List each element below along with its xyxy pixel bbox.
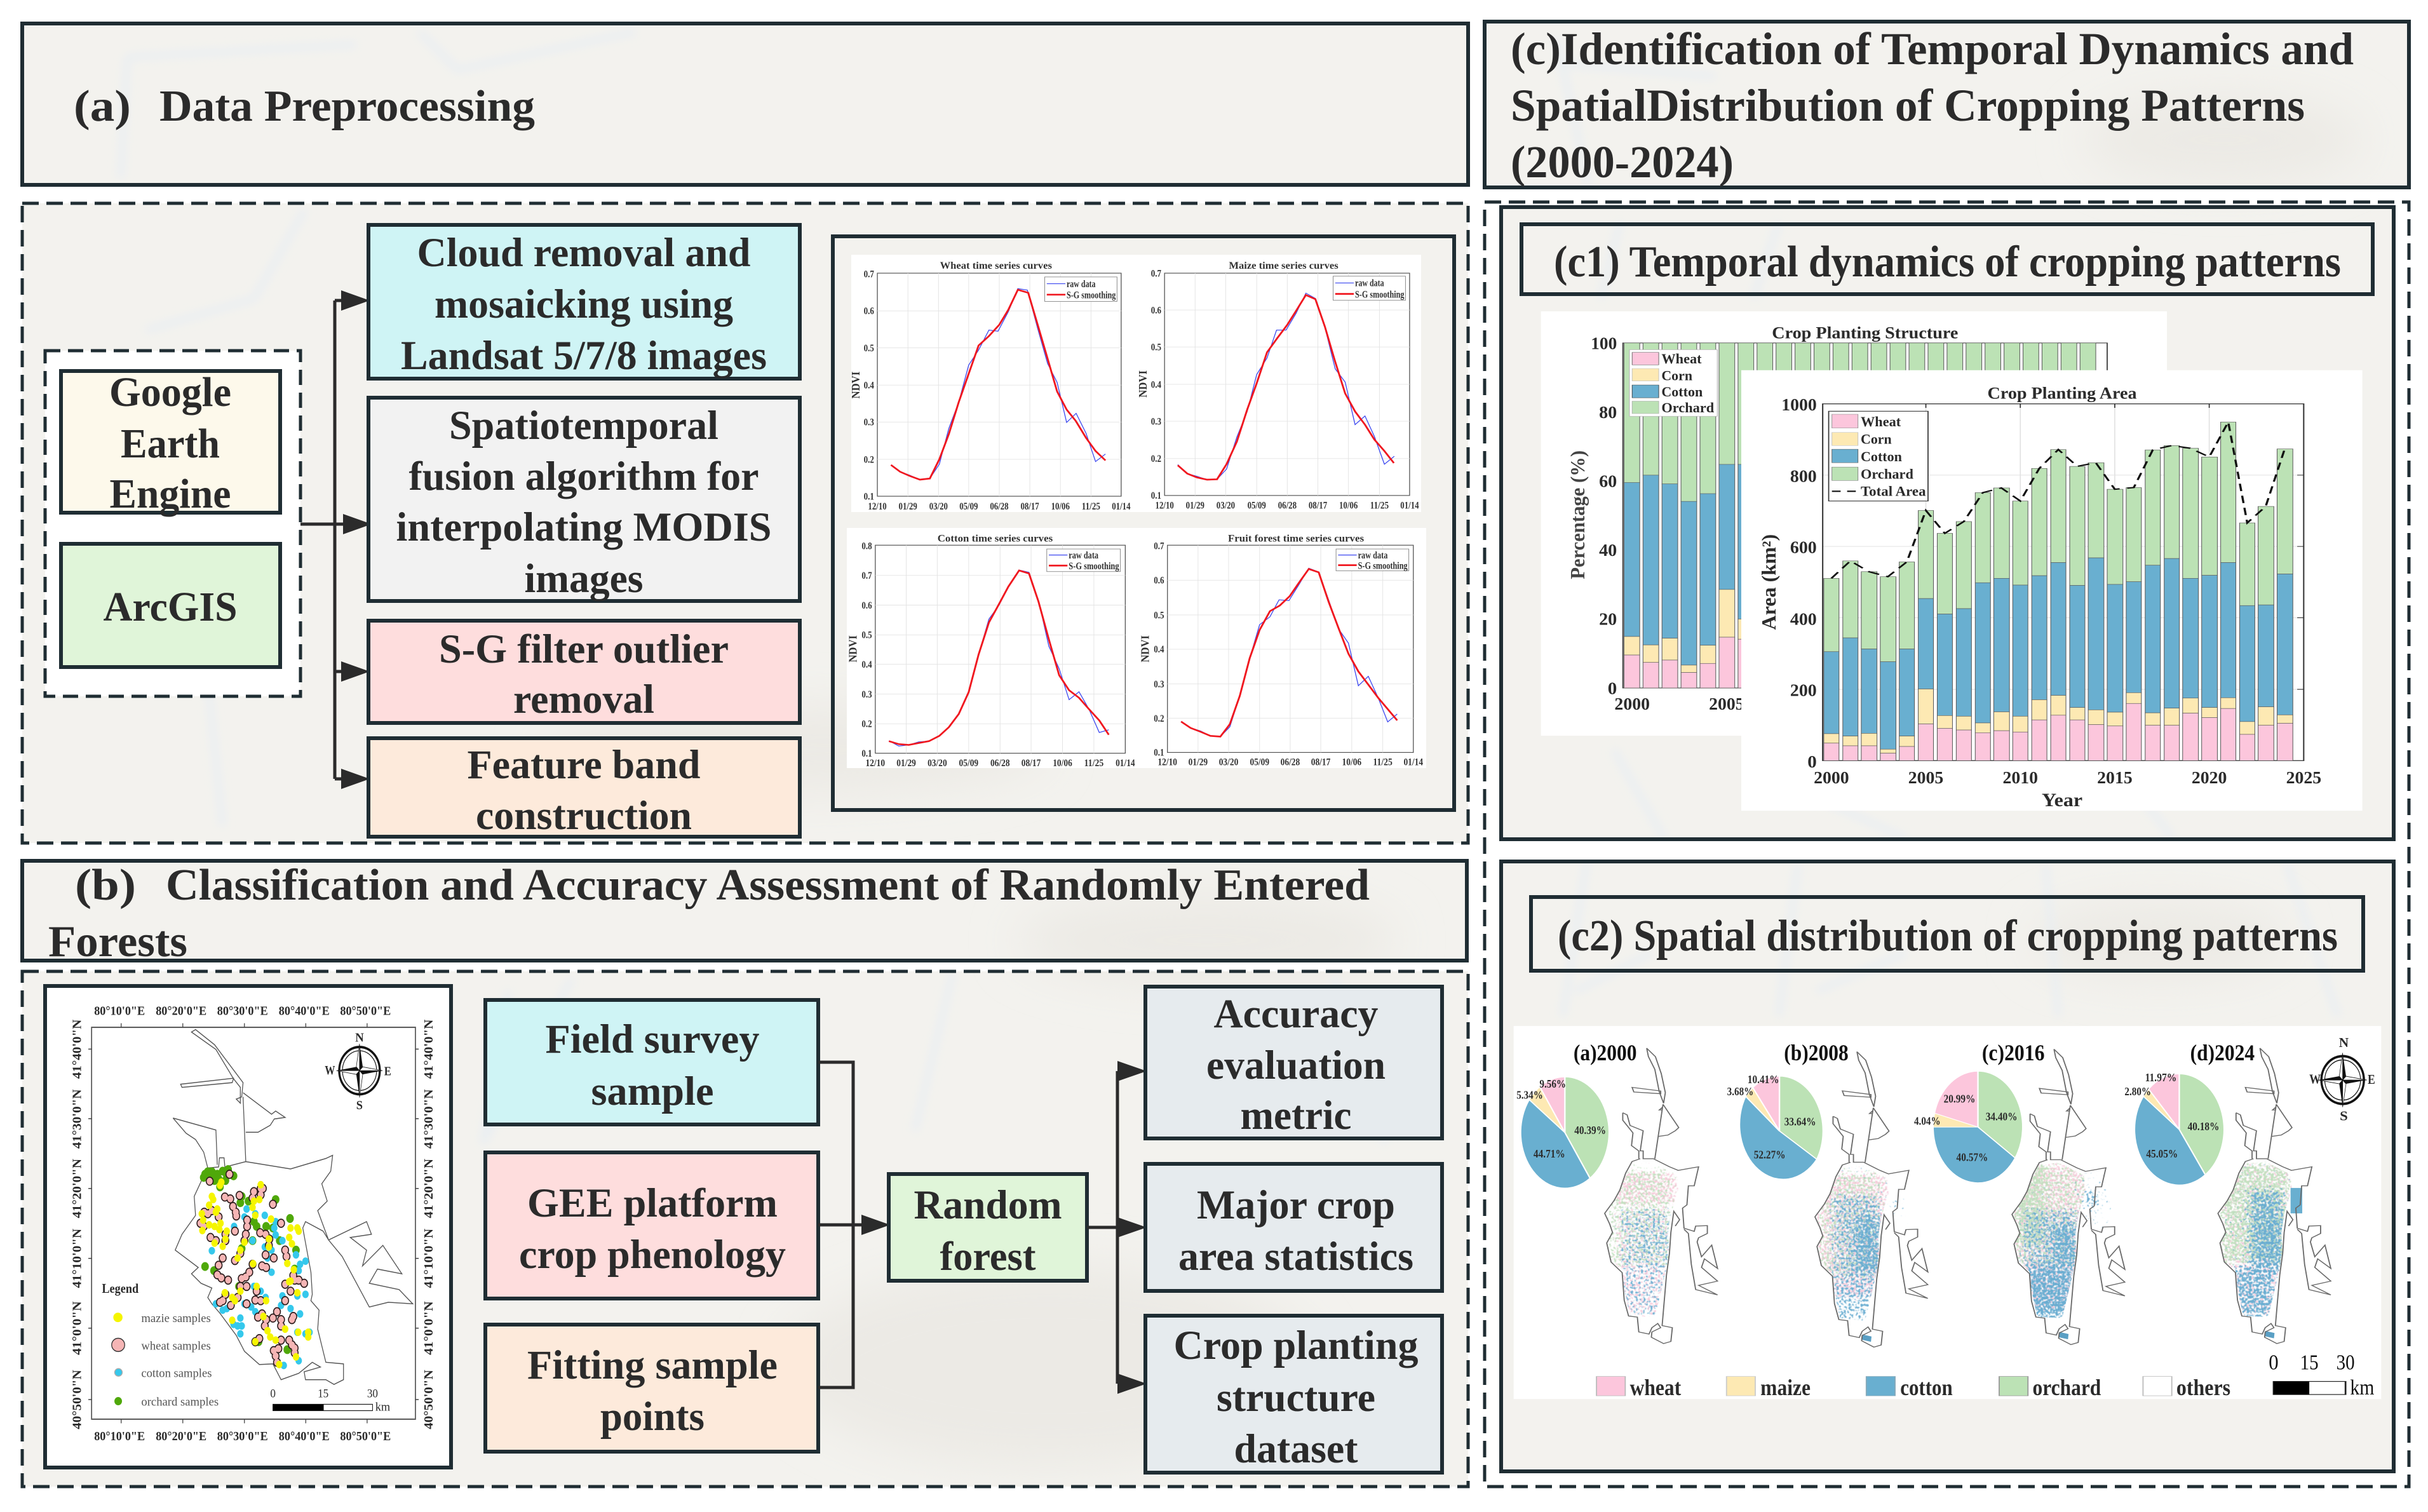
panel (a) header	[22, 24, 1468, 185]
legend: crop classes: orchard	[2033, 1375, 2101, 1400]
chart: maize NDVI: 0.7	[1151, 267, 1161, 279]
heading: (a): (a)	[74, 82, 131, 131]
latitude labels: 41°0'0"N	[70, 1301, 84, 1355]
map (b) 2008: 3.68%	[1727, 1085, 1753, 1098]
map (a) 2000: 5.34%	[1516, 1089, 1543, 1102]
chart: fruit forest NDVI: 03/20	[1219, 756, 1238, 767]
legend: area chart: Corn	[1861, 431, 1892, 447]
total area dashed line	[1831, 422, 2284, 578]
chart: cotton NDVI: 0.5	[861, 629, 872, 641]
longitude labels: 80°40'0"E	[279, 1004, 330, 1018]
box: Cloud removal: Landsat 5/7/8 images	[401, 333, 767, 379]
box: Cloud removal: Cloud removal and	[417, 230, 751, 276]
chart: crop planting structure: 2005	[1709, 694, 1744, 713]
chart: wheat NDVI: 11/25	[1082, 501, 1100, 512]
chart: fruit forest NDVI: 01/14	[1403, 756, 1424, 767]
icon: compass rose: N	[355, 1030, 364, 1045]
map legend: cotton samples	[141, 1367, 212, 1380]
map (c) 2016: 34.40%	[1986, 1110, 2018, 1123]
box: GEE platform: GEE platform	[527, 1180, 778, 1226]
map frame	[91, 1027, 415, 1419]
longitude labels: 80°40'0"E	[279, 1429, 330, 1444]
box: Cloud removal	[368, 225, 800, 379]
box: Feature band	[368, 738, 800, 839]
chart: crop planting structure	[1541, 311, 2167, 736]
chart: maize NDVI: 0.6	[1151, 304, 1161, 316]
panel: NDVI time series charts	[833, 236, 1454, 810]
box: Major crop area statistics: Major crop	[1197, 1182, 1395, 1228]
chart: crop planting structure: 100	[1591, 334, 1617, 353]
latitude labels: 41°40'0"N	[70, 1019, 84, 1079]
chart: maize NDVI: 0.4	[1151, 379, 1161, 390]
map (c) 2016: 4.04%	[1914, 1115, 1941, 1127]
study area boundary	[173, 1030, 413, 1384]
chart: wheat NDVI: 0.7	[864, 268, 874, 280]
legend: area chart	[1829, 411, 1928, 501]
chart: cotton NDVI: 08/17	[1022, 757, 1041, 769]
chart: cotton NDVI: S-G smoothing	[1069, 560, 1119, 572]
map (a) 2000: 40.39%	[1574, 1124, 1606, 1137]
box: Crop planting structure dataset: dataset	[1234, 1426, 1358, 1472]
box: Crop planting structure dataset	[1145, 1316, 1442, 1473]
map (b) 2008	[1727, 1040, 1928, 1347]
panel (c2) spatial distribution: others	[2176, 1375, 2230, 1400]
chart: crop planting area: 2000	[1814, 768, 1849, 787]
chart: crop planting area: Year	[2042, 790, 2082, 811]
chart: wheat NDVI: 08/17	[1020, 501, 1039, 512]
box: Spatiotemporal fusion: Spatiotemporal	[449, 403, 718, 449]
map (d) 2024: 2.80%	[2124, 1085, 2151, 1098]
icon: compass rose	[2309, 1036, 2375, 1123]
chart: maize NDVI: raw data	[1355, 277, 1384, 289]
panel (c) dashed container	[1485, 202, 2409, 1487]
chart: fruit forest NDVI: 0.5	[1154, 609, 1164, 621]
scale bar	[2269, 1351, 2374, 1399]
scale bar: km	[375, 1400, 391, 1414]
box: GEE platform	[485, 1152, 818, 1299]
chart: wheat NDVI: 0.6	[864, 305, 874, 316]
chart: maize NDVI: 0.5	[1151, 341, 1161, 353]
chart: wheat NDVI: 10/06	[1051, 501, 1070, 512]
chart: crop planting area: 400	[1790, 609, 1817, 628]
chart: crop planting structure: 20	[1599, 609, 1617, 628]
map legend: wheat samples	[141, 1339, 211, 1353]
box: Accuracy evaluation metric	[1145, 987, 1442, 1138]
chart: fruit forest NDVI: 01/29	[1189, 756, 1208, 767]
heading line 3: (2000-2024)	[1511, 137, 1734, 187]
box: ArcGIS	[61, 544, 280, 667]
chart: wheat NDVI: 03/20	[929, 501, 948, 512]
chart: cotton NDVI: 0.2	[861, 718, 872, 729]
box: Crop planting structure dataset: Crop planting	[1174, 1323, 1418, 1368]
chart: crop planting structure: 2000	[1614, 694, 1650, 713]
box: Accuracy evaluation metric: metric	[1240, 1093, 1352, 1138]
box: Accuracy evaluation metric: Accuracy	[1213, 991, 1379, 1037]
icon: compass rose: W	[2309, 1072, 2321, 1086]
chart: cotton NDVI: 0.7	[861, 570, 872, 581]
legend: area chart: Total Area	[1861, 483, 1926, 499]
chart: fruit forest NDVI: 0.6	[1154, 574, 1164, 586]
map (c) 2016: (c)2016	[1982, 1040, 2045, 1065]
chart: maize NDVI: 0.1	[1151, 490, 1161, 501]
latitude labels: 41°30'0"N	[421, 1089, 435, 1149]
chart: wheat NDVI: 0.3	[864, 416, 874, 428]
chart: maize NDVI: 03/20	[1217, 499, 1235, 511]
legend: structure chart: Cotton	[1661, 384, 1703, 400]
chart: cotton NDVI: 11/25	[1084, 757, 1103, 769]
chart: wheat NDVI: 01/29	[899, 501, 917, 512]
longitude labels: 80°20'0"E	[156, 1004, 206, 1018]
icon: compass rose: S	[2340, 1109, 2348, 1123]
chart: cotton NDVI: NDVI	[847, 635, 860, 663]
scale bar: 15	[318, 1386, 328, 1400]
connector: random forest to outputs	[1087, 1061, 1147, 1394]
heading: Classification title line 1: Classification and Accuracy Assessment of Randomly Entered	[166, 861, 1370, 910]
scale bar: 15	[2300, 1351, 2319, 1374]
box: Crop planting structure dataset: structure	[1217, 1375, 1375, 1421]
chart: crop planting area: 600	[1790, 537, 1817, 557]
heading: Data Preprocessing: Data Preprocessing	[159, 82, 535, 131]
map legend: orchard samples	[141, 1394, 219, 1408]
map (d) 2024: 45.05%	[2146, 1148, 2178, 1160]
chart: wheat NDVI: 05/09	[959, 501, 978, 512]
chart: crop planting area: 2005	[1908, 768, 1943, 787]
box: Major crop area statistics: area statistics	[1178, 1234, 1413, 1279]
chart: wheat NDVI: 12/10	[868, 501, 887, 512]
chart: maize NDVI: 01/14	[1400, 499, 1419, 511]
latitude labels: 40°50'0"N	[421, 1370, 435, 1429]
chart: wheat NDVI: NDVI	[849, 372, 862, 398]
map (c) 2016: 20.99%	[1944, 1093, 1975, 1105]
chart: crop planting area: 0	[1807, 752, 1817, 771]
heading box c1	[1521, 224, 2373, 294]
scale bar: 30	[2337, 1351, 2355, 1374]
chart: wheat NDVI: raw data	[1067, 278, 1096, 290]
chart: wheat NDVI: 0.1	[864, 490, 874, 502]
legend: crop classes: wheat	[1630, 1375, 1681, 1400]
chart: cotton NDVI: 05/09	[959, 757, 978, 769]
legend: area chart: Wheat	[1861, 414, 1901, 429]
chart: fruit forest NDVI: 11/25	[1373, 756, 1393, 767]
longitude labels: 80°20'0"E	[156, 1429, 206, 1444]
chart: fruit forest NDVI: raw data	[1358, 550, 1388, 561]
box: Fitting sample points: points	[600, 1394, 705, 1440]
legend: crop classes: cotton	[1900, 1375, 1953, 1400]
chart: crop planting area: Area (km²)	[1758, 534, 1780, 630]
map (c) 2016	[1914, 1040, 2125, 1345]
figure background	[1514, 1026, 2381, 1399]
latitude labels: 41°40'0"N	[421, 1019, 435, 1079]
chart: cotton NDVI: 10/06	[1053, 757, 1072, 769]
scale bar: 30	[367, 1386, 378, 1400]
chart: fruit forest NDVI: 05/09	[1250, 756, 1269, 767]
latitude labels: 41°10'0"N	[70, 1229, 84, 1288]
chart: wheat NDVI: 0.4	[864, 379, 874, 391]
box: S-G filter: S-G filter outlier	[439, 626, 729, 672]
box: Google Earth Engine: Google	[109, 369, 231, 415]
chart: fruit forest NDVI: Fruit forest time series curves	[1228, 532, 1364, 544]
pie 2008	[1739, 1076, 1823, 1179]
panel (a) dashed workflow container	[22, 203, 1468, 843]
latitude labels: 41°10'0"N	[421, 1229, 435, 1288]
map (a) 2000: 44.71%	[1534, 1148, 1565, 1160]
chart: cotton NDVI: 06/28	[990, 757, 1010, 769]
latitude labels: 41°30'0"N	[70, 1089, 84, 1149]
legend: area chart: Orchard	[1861, 466, 1913, 482]
icon: compass rose: S	[356, 1098, 363, 1112]
chart: wheat NDVI: S-G smoothing	[1067, 289, 1116, 301]
heading box c2	[1531, 897, 2363, 971]
chart: maize NDVI: NDVI	[1137, 370, 1149, 398]
arrows: platforms to preprocessing steps	[300, 290, 372, 789]
chart: fruit forest NDVI: 0.3	[1154, 678, 1164, 690]
box: Google Earth Engine: Earth	[121, 421, 220, 467]
legend: structure chart	[1629, 349, 1717, 416]
box: Random forest: Random	[914, 1182, 1062, 1228]
chart: maize NDVI: 10/06	[1339, 499, 1358, 511]
pie 2016	[1933, 1071, 2023, 1183]
box: GEE platform: crop phenology	[519, 1232, 786, 1278]
chart: crop planting structure: 60	[1599, 471, 1617, 490]
scale bar	[270, 1386, 391, 1414]
box: Fitting sample points: Fitting sample	[527, 1342, 778, 1388]
map (a) 2000	[1516, 1040, 1718, 1344]
box: Random forest: forest	[940, 1234, 1036, 1279]
longitude labels: 80°30'0"E	[217, 1429, 268, 1444]
box: Field survey sample	[485, 1000, 818, 1124]
latitude labels: 41°0'0"N	[421, 1301, 435, 1355]
chart: cotton NDVI: 0.1	[861, 748, 872, 759]
heading box c1: (c1) Temporal dynamics of cropping patterns	[1554, 238, 2341, 287]
legend: structure chart: Wheat	[1661, 351, 1702, 367]
panel (c1) temporal dynamics	[1501, 207, 2394, 839]
map (d) 2024: 11.97%	[2145, 1072, 2176, 1084]
legend: structure chart: Corn	[1661, 368, 1692, 384]
chart: crop planting area	[1741, 370, 2363, 811]
box: Spatiotemporal fusion: images	[525, 556, 643, 602]
chart: fruit forest NDVI: 0.2	[1154, 712, 1164, 724]
panel (b) header	[22, 861, 1467, 966]
data platform group	[45, 351, 300, 696]
heading: title line 2: Forests	[48, 917, 187, 966]
longitude labels	[94, 1004, 391, 1444]
chart: crop planting structure: 80	[1599, 402, 1617, 422]
map legend	[102, 1282, 219, 1408]
chart: maize NDVI	[1137, 260, 1419, 511]
chart: cotton NDVI: 03/20	[927, 757, 947, 769]
chart: maize NDVI: Maize time series curves	[1229, 260, 1339, 271]
chart: crop planting area: 1000	[1781, 395, 1817, 414]
box: Feature band: construction	[476, 793, 692, 839]
box: Major crop area statistics	[1145, 1164, 1442, 1291]
connector: inputs to random forest	[818, 1062, 890, 1387]
map (c) 2016: 40.57%	[1957, 1151, 1988, 1164]
chart: wheat NDVI: 0.5	[864, 342, 874, 354]
pie 2024	[2135, 1074, 2224, 1185]
panel: sample points map	[45, 986, 451, 1468]
chart: cotton NDVI: 12/10	[866, 757, 885, 769]
latitude labels: 41°20'0"N	[421, 1159, 435, 1218]
box: S-G filter: removal	[513, 677, 654, 722]
chart: cotton NDVI: 0.8	[861, 540, 872, 552]
chart: fruit forest NDVI: 0.7	[1154, 540, 1164, 552]
chart: crop planting structure: Crop Planting Structure	[1772, 323, 1958, 342]
map (d) 2024	[2124, 1040, 2331, 1344]
longitude labels: 80°10'0"E	[94, 1004, 145, 1018]
box: Google Earth Engine	[61, 369, 280, 517]
map (b) 2008: 10.41%	[1748, 1074, 1779, 1086]
box: Field survey sample: sample	[591, 1069, 714, 1114]
chart: maize NDVI: 11/25	[1370, 499, 1389, 511]
map (b) 2008: (b)2008	[1784, 1040, 1849, 1065]
map (b) 2008: 52.27%	[1754, 1149, 1786, 1161]
chart: cotton NDVI: Cotton time series curves	[938, 532, 1053, 544]
chart: cotton NDVI: 0.6	[861, 600, 872, 611]
map (d) 2024: 40.18%	[2188, 1121, 2219, 1133]
chart: crop planting area: 2010	[2002, 768, 2038, 787]
box: Cloud removal: mosaicking using	[435, 281, 733, 327]
longitude labels: 80°50'0"E	[340, 1004, 391, 1018]
map legend: Legend	[102, 1282, 138, 1296]
chart: maize NDVI: 12/10	[1156, 499, 1174, 511]
box: S-G filter	[368, 621, 800, 723]
box: Spatiotemporal fusion	[368, 398, 800, 602]
chart: wheat NDVI: 06/28	[990, 501, 1009, 512]
chart: crop planting area: 800	[1790, 466, 1817, 485]
longitude labels: 80°50'0"E	[340, 1429, 391, 1444]
chart: crop planting structure: 40	[1599, 540, 1617, 560]
chart: maize NDVI: S-G smoothing	[1355, 288, 1405, 300]
chart: wheat NDVI: 0.2	[864, 454, 874, 465]
chart: maize NDVI: 06/28	[1278, 499, 1297, 511]
chart: fruit forest NDVI: 06/28	[1281, 756, 1300, 767]
icon: compass rose: W	[325, 1063, 335, 1078]
pie 2000	[1521, 1077, 1609, 1188]
chart: crop planting structure: 0	[1608, 678, 1617, 698]
chart: crop planting area: 200	[1790, 680, 1817, 700]
box: Spatiotemporal fusion: fusion algorithm for	[409, 454, 759, 499]
icon: compass rose	[325, 1030, 391, 1112]
latitude labels: 41°20'0"N	[70, 1159, 84, 1218]
heading box c2: (c2) Spatial distribution of cropping patterns	[1558, 912, 2338, 961]
chart: wheat NDVI	[849, 260, 1131, 512]
chart: fruit forest NDVI: S-G smoothing	[1358, 560, 1408, 571]
chart: crop planting area: 2015	[2097, 768, 2133, 787]
panel (b) dashed workflow container	[22, 971, 1468, 1487]
legend: structure chart: Orchard	[1661, 400, 1715, 415]
sample points	[201, 1170, 309, 1365]
map (d) 2024: (d)2024	[2190, 1040, 2255, 1065]
box: Field survey sample: Field survey	[545, 1016, 760, 1062]
chart: cotton NDVI: 0.4	[861, 659, 872, 670]
chart: fruit forest NDVI: NDVI	[1139, 635, 1152, 663]
chart: fruit forest NDVI	[1139, 532, 1424, 767]
icon: compass rose: E	[384, 1065, 391, 1079]
heading line 1: (c)Identification of Temporal Dynamics and	[1511, 24, 2354, 74]
latitude labels: 40°50'0"N	[70, 1370, 84, 1429]
chart: maize NDVI: 01/29	[1186, 499, 1204, 511]
chart: fruit forest NDVI: 0.4	[1154, 644, 1164, 655]
icon: compass rose: N	[2339, 1036, 2349, 1050]
chart: fruit forest NDVI: 0.1	[1154, 746, 1164, 759]
chart: maize NDVI: 08/17	[1309, 499, 1327, 511]
map graticule ticks	[88, 1023, 419, 1423]
box: Accuracy evaluation metric: evaluation	[1206, 1043, 1386, 1088]
legend: area chart: Cotton	[1861, 449, 1902, 464]
chart: maize NDVI: 0.2	[1151, 453, 1161, 464]
chart: cotton NDVI: 01/14	[1116, 757, 1135, 769]
chart: maize NDVI: 05/09	[1248, 499, 1266, 511]
legend: crop classes	[1596, 1375, 2230, 1400]
scale bar: 0	[270, 1386, 276, 1400]
chart: fruit forest NDVI: 12/10	[1157, 756, 1177, 767]
box: Random forest	[889, 1174, 1087, 1281]
map (a) 2000: (a)2000	[1574, 1040, 1636, 1065]
box: Fitting sample points	[485, 1325, 818, 1452]
chart: cotton NDVI: 0.3	[861, 689, 872, 700]
chart: cotton NDVI: 01/29	[896, 757, 916, 769]
map legend: mazie samples	[141, 1311, 211, 1325]
chart: wheat NDVI: 01/14	[1112, 501, 1131, 512]
legend: crop classes: maize	[1760, 1375, 1811, 1400]
heading: (b): (b)	[75, 861, 136, 910]
panel (c2) spatial distribution: E	[2368, 1072, 2375, 1086]
chart: cotton NDVI	[847, 532, 1135, 769]
chart: crop planting area: 2020	[2192, 768, 2227, 787]
box: ArcGIS: ArcGIS	[103, 584, 238, 630]
panel (c2) spatial distribution	[1501, 861, 2394, 1471]
map (b) 2008: 33.64%	[1784, 1116, 1816, 1128]
chart: fruit forest NDVI: 08/17	[1311, 756, 1330, 767]
chart: crop planting structure: Percentage (%)	[1567, 450, 1589, 579]
longitude labels: 80°10'0"E	[94, 1429, 145, 1444]
chart: crop planting area: 2025	[2286, 768, 2321, 787]
heading line 2: SpatialDistribution of Cropping Patterns	[1511, 80, 2305, 131]
chart: cotton NDVI: raw data	[1069, 550, 1099, 561]
scale bar: 0	[2269, 1351, 2279, 1374]
panel (c) header	[1485, 22, 2409, 187]
longitude labels: 80°30'0"E	[217, 1004, 268, 1018]
latitude labels	[70, 1019, 435, 1429]
box: Feature band: Feature band	[468, 742, 700, 788]
box: Google Earth Engine: Engine	[109, 471, 231, 517]
chart: crop planting area: Crop Planting Area	[1988, 384, 2137, 403]
panel (c2) spatial distribution: km	[2350, 1375, 2374, 1399]
box: Spatiotemporal fusion: interpolating MODIS	[396, 504, 771, 550]
map (a) 2000: 9.56%	[1539, 1078, 1566, 1090]
chart: maize NDVI: 0.3	[1151, 415, 1161, 427]
chart: wheat NDVI: Wheat time series curves	[940, 260, 1052, 271]
chart: fruit forest NDVI: 10/06	[1342, 756, 1361, 767]
